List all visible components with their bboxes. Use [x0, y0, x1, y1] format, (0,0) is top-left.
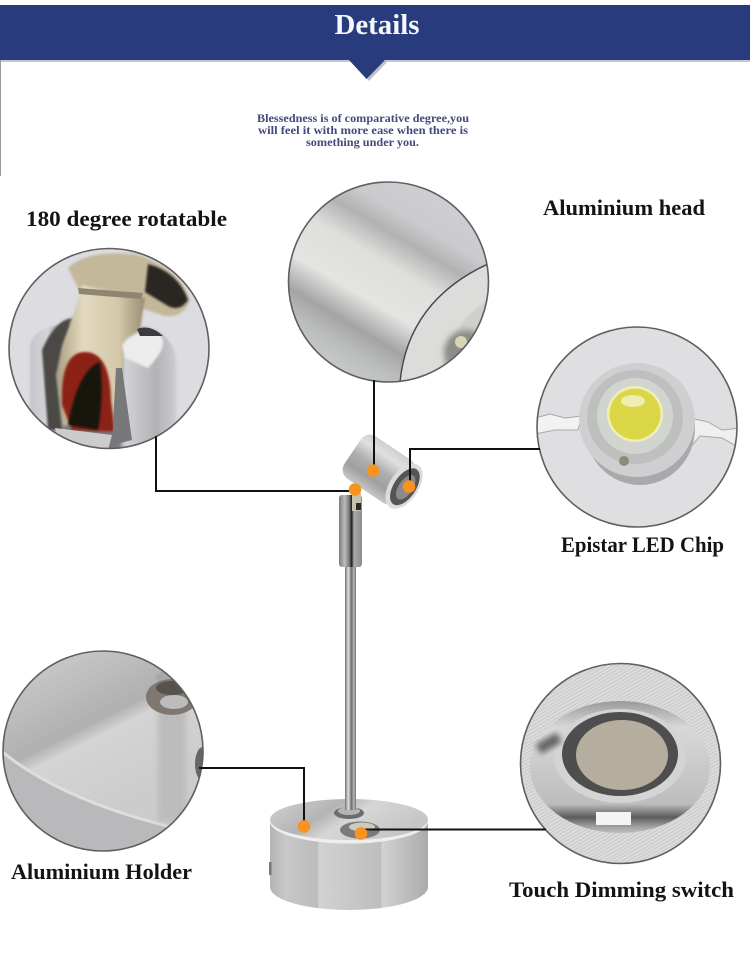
leader line: aluminium head [373, 380, 375, 470]
lamp head [338, 430, 430, 515]
circle outline: aluminium head [288, 182, 488, 382]
label: Aluminium head: Aluminium head [543, 195, 705, 220]
header banner [0, 5, 750, 81]
yellow lens [607, 386, 663, 442]
brass flange [68, 253, 190, 316]
callout circle: rotatable joint [10, 249, 208, 448]
brass neck [56, 285, 145, 432]
callout circle: aluminium head [289, 182, 488, 382]
label: 180 degree rotatable: 180 degree rotatable [26, 206, 227, 231]
front face [401, 266, 488, 380]
bright dent [122, 332, 163, 368]
tagline text block: will feel it with more ease when there is [258, 125, 469, 137]
marker dots [298, 464, 415, 840]
page edge rule [0, 60, 1, 176]
lamp arm tube [339, 493, 362, 567]
circle outline: rotatable [9, 248, 209, 448]
leader line: aluminium holder [199, 768, 304, 826]
callout circle: touch switch [521, 664, 720, 863]
label: Aluminium Holder: Aluminium Holder [11, 859, 192, 884]
leader line: touch switch [361, 828, 546, 830]
heading: Details: Details [334, 10, 420, 41]
chrome arm [30, 325, 178, 450]
lamp base [269, 790, 428, 910]
chip leads [535, 414, 582, 434]
rim and side [4, 759, 166, 850]
tagline text block [257, 113, 470, 149]
metal button [576, 720, 668, 790]
leader line: LED chip [410, 449, 540, 486]
lamp product [269, 430, 430, 910]
chrome lower strip [112, 368, 132, 445]
hole [195, 747, 202, 778]
tagline text block: something under you. [306, 137, 419, 149]
tagline text block: Blessedness is of comparative degree,you [257, 113, 470, 125]
circle outline: LED chip [537, 327, 737, 527]
machined band [158, 710, 186, 822]
callout circle: aluminium holder [4, 652, 202, 850]
dark gasket [562, 712, 678, 796]
red cavity [62, 352, 115, 432]
circle outline: touch switch [520, 664, 720, 864]
highlight [596, 812, 631, 825]
lamp pole [345, 562, 356, 807]
circle outline: aluminium holder [3, 651, 203, 851]
chip body [592, 422, 695, 485]
callout circle: LED chip [538, 328, 736, 526]
dark fork edge [42, 318, 72, 430]
LED lens [440, 327, 476, 364]
chrome ring [530, 701, 710, 833]
leader line: rotatable [156, 436, 355, 491]
label: Epistar LED Chip: Epistar LED Chip [561, 532, 724, 557]
knob [154, 672, 170, 682]
label: Touch Dimming switch: Touch Dimming switch [509, 877, 734, 902]
